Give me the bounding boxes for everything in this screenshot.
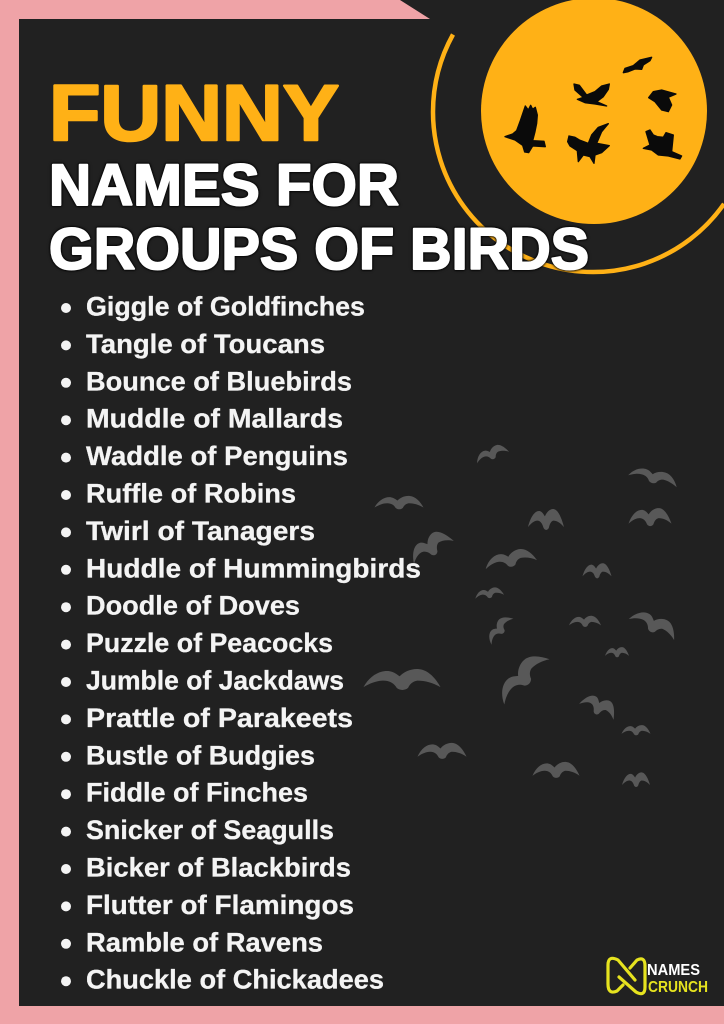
- bullet list of bird group names: [61, 292, 421, 995]
- list text: Bounce of Bluebirds: [86, 366, 352, 396]
- orange ring: [433, 34, 724, 272]
- title line: NAMES FOR: NAMES FOR: [49, 153, 399, 218]
- list text: [86, 292, 421, 995]
- list text: Doodle of Doves: [86, 591, 300, 621]
- list text: Flutter of Flamingos: [86, 890, 354, 920]
- list text: Waddle of Penguins: [86, 441, 348, 471]
- list text: Jumble of Jackdaws: [86, 666, 344, 696]
- list text: Prattle of Parakeets: [86, 703, 353, 733]
- logo text: NAMES: NAMES: [647, 962, 700, 979]
- list text: Ramble of Ravens: [86, 927, 323, 957]
- bullets: [61, 303, 71, 986]
- title: [49, 68, 589, 282]
- list text: Tangle of Toucans: [86, 329, 325, 359]
- list text: Giggle of Goldfinches: [86, 292, 365, 322]
- orange sun: [481, 0, 707, 224]
- logo text: CRUNCH: CRUNCH: [648, 979, 708, 996]
- black birds on sun: [505, 57, 682, 163]
- title line: FUNNY: FUNNY: [49, 68, 339, 157]
- list text: Muddle of Mallards: [86, 404, 343, 434]
- list text: Fiddle of Finches: [86, 778, 308, 808]
- list text: Twirl of Tanagers: [86, 516, 315, 546]
- list text: Puzzle of Peacocks: [86, 628, 333, 658]
- list text: Chuckle of Chickadees: [86, 965, 384, 995]
- title line: GROUPS OF BIRDS: GROUPS OF BIRDS: [49, 217, 589, 282]
- list text: Huddle of Hummingbirds: [86, 553, 421, 583]
- list text: Bustle of Budgies: [86, 740, 315, 770]
- list text: Bicker of Blackbirds: [86, 852, 351, 882]
- logo icon: [608, 958, 645, 994]
- list text: Snicker of Seagulls: [86, 815, 334, 845]
- background bird flock: [364, 442, 680, 787]
- logo: Names Crunch: [608, 958, 708, 996]
- list text: Ruffle of Robins: [86, 478, 296, 508]
